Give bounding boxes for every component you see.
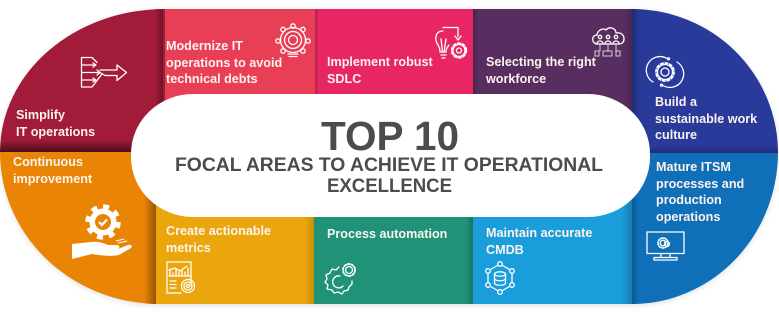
panel: simplify IT operations bbox=[0, 9, 165, 152]
text: build a culture: Build a bbox=[655, 95, 698, 109]
icon: gears bbox=[325, 264, 355, 294]
text: mature ITSM: Mature ITSM bbox=[656, 160, 731, 174]
text: simplify IT operations: IT operations bbox=[16, 125, 95, 139]
text: selecting the right workforce: workforce bbox=[485, 72, 546, 86]
text: mature ITSM: production bbox=[656, 193, 722, 207]
text: modernize IT: operations to avoid bbox=[166, 56, 282, 70]
panel: mature ITSM bbox=[632, 152, 778, 304]
text: continuous improvement: Continuous bbox=[13, 155, 83, 169]
text: build a culture: sustainable work bbox=[655, 112, 758, 126]
panel: process automation bbox=[314, 190, 474, 304]
icon: hand holding gear bbox=[72, 206, 132, 259]
text: implement robust SDLC: SDLC bbox=[327, 72, 361, 86]
panel: maintain accurate CMDB bbox=[473, 190, 635, 304]
text: continuous improvement: improvement bbox=[13, 172, 93, 186]
subheading: FOCAL AREAS TO ACHIEVE IT OPERATIONAL bbox=[175, 155, 603, 176]
title bbox=[175, 113, 603, 197]
text: maintain accurate CMDB: CMDB bbox=[486, 243, 524, 257]
text: modernize IT: Modernize IT bbox=[166, 39, 243, 53]
text: simplify IT operations: Simplify bbox=[16, 108, 65, 122]
text: mature ITSM: operations bbox=[656, 210, 720, 224]
icon: lightbulb with circuit bbox=[276, 24, 310, 56]
text: mature ITSM: processes and bbox=[656, 177, 744, 191]
subheading: EXCELLENCE bbox=[327, 176, 452, 197]
center white pill bbox=[131, 94, 650, 217]
icon: monitor with gear bbox=[647, 232, 684, 260]
icon: report with target bbox=[167, 262, 194, 293]
text: create actionable metrics: metrics bbox=[166, 241, 211, 255]
panel: selecting the right workforce bbox=[473, 9, 635, 129]
icon: merging arrows bbox=[82, 58, 126, 87]
panel: create actionable metrics bbox=[156, 190, 316, 304]
icon: bulb and gear bbox=[436, 28, 466, 58]
text: create actionable metrics: Create actionable bbox=[166, 224, 271, 238]
icon: cloud with people bbox=[593, 28, 624, 56]
text: selecting the right workforce: Selecting the right bbox=[486, 55, 597, 69]
text: maintain accurate CMDB: Maintain accurate bbox=[486, 226, 592, 240]
panel: build a sustainable work culture bbox=[632, 9, 778, 153]
heading: top 10: TOP 10 bbox=[321, 113, 459, 159]
text: modernize IT: technical debts bbox=[166, 72, 258, 86]
text: implement robust SDLC: Implement robust bbox=[327, 55, 433, 69]
text: build a culture: culture bbox=[655, 128, 697, 142]
panel: modernize IT operations bbox=[163, 9, 316, 129]
icon: circular gear bbox=[646, 57, 684, 87]
icon: database network bbox=[486, 262, 514, 294]
panel: implement robust SDLC bbox=[315, 9, 474, 129]
text: process automation: Process automation bbox=[327, 227, 447, 241]
panel: continuous improvement bbox=[0, 152, 156, 304]
